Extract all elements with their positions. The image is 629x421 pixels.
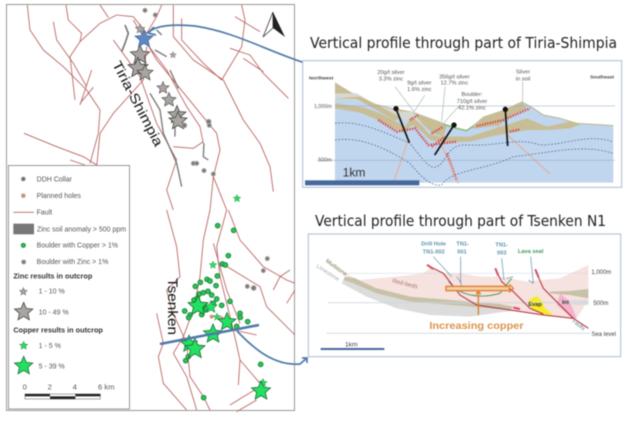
legend items: 4 — [73, 382, 78, 391]
profile annotations: 1.6% zinc — [407, 87, 432, 93]
copper stars south — [180, 261, 271, 399]
profile annotations: Int — [562, 300, 569, 306]
arrow: map to Tsenken profile — [237, 331, 307, 364]
legend items: 6 km — [98, 382, 115, 391]
profile annotations: 20g/t silver — [377, 70, 405, 76]
profile annotations: Faults — [571, 319, 586, 332]
profile annotations: Red-beds — [392, 278, 418, 291]
profile annotations: 500m — [593, 301, 608, 307]
profile annotations: in soil — [516, 76, 530, 82]
panel: geological map — [6, 4, 295, 412]
panel: Tiria-Shimpia profile — [303, 61, 622, 187]
legend items: 1 - 5 % — [39, 343, 61, 350]
profile annotations: 710g/t silver — [457, 99, 487, 105]
legend items: 2 — [48, 382, 52, 391]
legend items: Boulder with Zinc > 1% — [37, 259, 108, 266]
panel: Tsenken profile — [308, 234, 621, 357]
legend items: Zinc soil anomaly > 500 ppm — [37, 226, 126, 233]
profile annotations: Evap — [528, 302, 542, 308]
rock layers — [335, 82, 613, 183]
section line Tsenken — [160, 325, 259, 344]
zinc outcrop stars north — [128, 24, 187, 129]
section start star — [135, 30, 153, 47]
profile annotations: 42.1% zinc — [458, 105, 486, 111]
arrow: map to Tiria-Shimpia profile — [148, 25, 305, 63]
profile annotations — [309, 69, 614, 164]
profile annotations: Drill Hole — [421, 241, 446, 247]
label: Tsenken: Tsenken — [165, 278, 180, 335]
legend — [8, 166, 130, 409]
title: Tsenken profile: Vertical profile through part of Tsenken N1 — [315, 212, 606, 230]
profile annotations: Northwest — [309, 75, 334, 81]
profile annotations: TN1-002 — [423, 249, 445, 255]
legend items: Boulder with Copper > 1% — [37, 243, 118, 250]
map faults south — [157, 210, 295, 412]
legend items: Zinc results in outcrop — [13, 271, 93, 280]
legend items: Fault — [37, 210, 52, 217]
drill collars north — [143, 8, 215, 176]
profile annotations: Mudstone — [324, 258, 348, 278]
rock layers — [327, 265, 590, 333]
profile annotations: 12.7% zinc — [440, 81, 468, 87]
profile annotations: 001 — [457, 249, 467, 255]
legend items: 5 - 39 % — [39, 364, 65, 371]
profile annotations: TN1- — [456, 241, 469, 247]
faults and drill holes — [317, 82, 615, 185]
scale bar 1km — [321, 342, 384, 350]
faults — [427, 257, 588, 328]
profile annotations: Lava seal — [518, 249, 544, 255]
label: Tiria-Shimpia: Tiria-Shimpia — [109, 58, 166, 149]
profile annotations: Silver — [516, 69, 530, 75]
map faults north — [24, 5, 288, 210]
profile annotations: 1,000m — [314, 104, 332, 110]
red hatched mineralised zones — [378, 108, 530, 180]
legend items: 0 — [23, 382, 27, 391]
profile annotations: 500m — [318, 158, 332, 164]
increasing copper marker — [446, 284, 513, 315]
boulders south — [182, 223, 269, 400]
profile annotations: 1,000m — [591, 270, 611, 276]
profile annotations: 9g/t silver — [407, 81, 432, 87]
scale bar 1km — [305, 166, 419, 185]
profile annotations: 356g/t silver — [439, 74, 470, 80]
scale bar 1km: 1km — [343, 166, 365, 180]
profile annotations: Southeast — [590, 75, 614, 81]
legend items: Copper results in outcrop — [13, 325, 103, 334]
profile annotations — [315, 241, 616, 338]
legend items: 10 - 49 % — [39, 309, 69, 316]
profile annotations: Sea level — [591, 332, 616, 338]
legend items — [13, 176, 126, 399]
profile annotations: 003 — [497, 251, 506, 257]
legend items: DDH Collar — [37, 176, 73, 183]
scale bar 1km: 1km — [345, 342, 358, 349]
profile annotations: TN1- — [495, 242, 508, 248]
copper star north — [233, 194, 241, 202]
profile annotations: Limestone — [315, 264, 340, 283]
profile annotations: Boulder: — [461, 92, 483, 98]
profile annotations: Increasing copper — [429, 321, 524, 332]
profile annotations: 3.3% zinc — [379, 76, 403, 82]
icon: north arrow — [263, 12, 285, 37]
legend items: Planned holes — [37, 193, 81, 200]
legend items: 1 - 10 % — [39, 289, 65, 296]
